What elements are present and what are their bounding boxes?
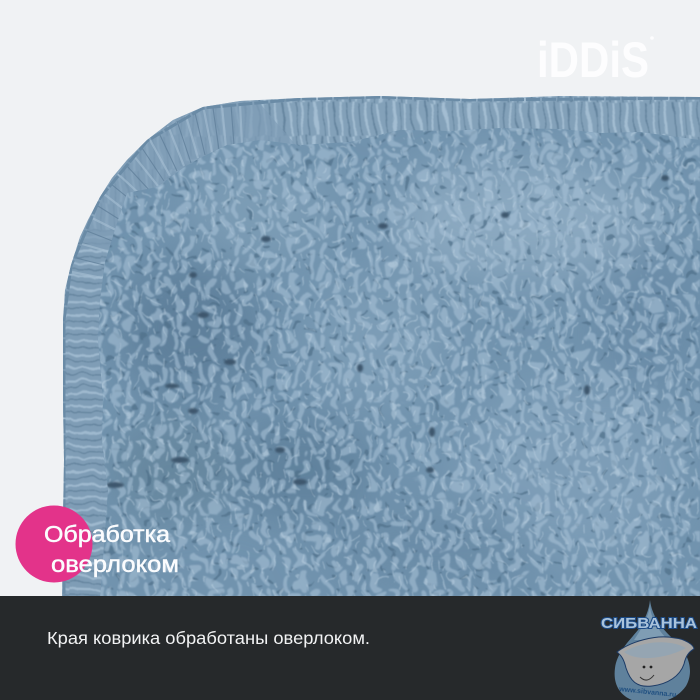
bottom caption bar bbox=[0, 596, 700, 700]
badge title: оверлоком bbox=[51, 551, 179, 577]
pile tonal variation bbox=[118, 151, 666, 546]
brand logo: iDDiS: iDDiS bbox=[537, 32, 649, 88]
badge: pink circle with title bbox=[16, 506, 179, 582]
pile dark gaps texture bbox=[100, 128, 700, 596]
overlock edge band bbox=[62, 96, 700, 596]
rug photo bbox=[62, 96, 700, 596]
pile fine fibres bbox=[99, 128, 700, 596]
dark gaps in the pile bbox=[106, 175, 669, 488]
shag pile bbox=[98, 128, 700, 596]
water drop bbox=[615, 600, 690, 700]
logo url: www.sibvanna.ru bbox=[618, 686, 677, 699]
pink circle bbox=[16, 506, 92, 582]
logo: Сибванна drop with bathtub bbox=[601, 600, 697, 700]
pile tufts texture bbox=[98, 128, 700, 596]
badge title bbox=[44, 521, 179, 577]
bathtub bbox=[617, 637, 694, 686]
caption text: Края коврика обработаны оверлоком. bbox=[47, 628, 370, 648]
bathtub face bbox=[640, 666, 654, 680]
badge title: Обработка bbox=[44, 521, 170, 547]
logo wordmark: СИБВАННА bbox=[601, 615, 697, 632]
